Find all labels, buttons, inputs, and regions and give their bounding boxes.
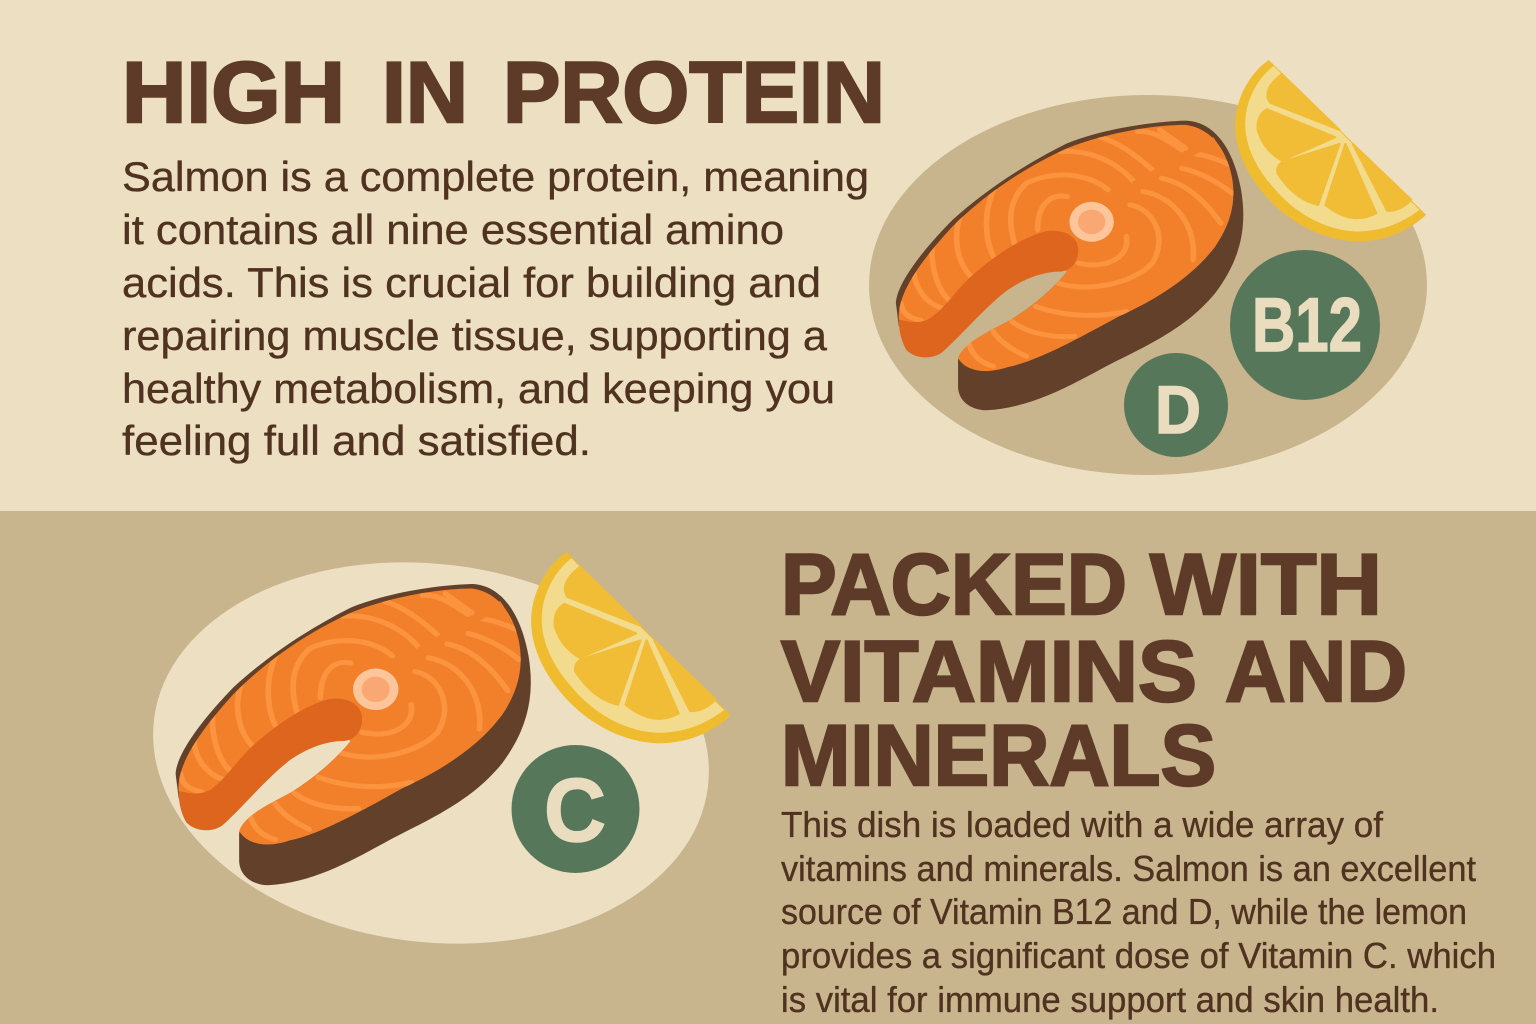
text block: protein description: Salmon is a complete protein, meaning (122, 153, 869, 200)
heading: packed with vitamins and minerals: MINERALS (781, 708, 1216, 804)
text block: protein description: repairing muscle tissue, supporting a (122, 312, 828, 359)
vitamin badge: B12: B12 (1252, 283, 1362, 368)
text block: protein description: acids. This is crucial for building and (122, 259, 821, 306)
heading: packed with vitamins and minerals: PACKED (781, 537, 1127, 633)
background: bottom tan band (0, 511, 1536, 1024)
heading: packed with vitamins and minerals: WITH (1150, 537, 1382, 633)
vitamin badge: B12 (1230, 250, 1380, 400)
vitamin badge: C (512, 745, 640, 873)
text block: vitamins description: is vital for immune support and skin health. (781, 979, 1439, 1020)
text block: vitamins description: This dish is loaded with a wide array of (781, 804, 1384, 845)
text block: vitamins description: provides a significant dose of Vitamin C. which (781, 935, 1496, 976)
plate (869, 95, 1427, 475)
text block: protein description: it contains all nine essential amino (122, 206, 784, 253)
heading: high in protein (122, 45, 885, 141)
panel: high in protein (122, 45, 885, 464)
lemon wedge (1235, 60, 1426, 241)
background: top cream band (0, 0, 1536, 511)
heading: packed with vitamins and minerals: VITAMINS (781, 624, 1197, 720)
heading: packed with vitamins and minerals: AND (1225, 624, 1407, 720)
heading: packed with vitamins and minerals (781, 537, 1407, 804)
vitamin badge: D (1124, 353, 1228, 457)
vitamin badge: D: D (1155, 372, 1201, 448)
heading: high in protein: IN (382, 45, 468, 141)
vitamin badge: C: C (544, 761, 606, 861)
salmon steak (896, 121, 1243, 410)
text block: vitamins description: vitamins and minerals. Salmon is an excellent (781, 848, 1476, 889)
text block: protein description: feeling full and satisfied. (122, 417, 591, 464)
salmon steak (176, 584, 531, 885)
illustration: salmon plate with vitamin C (131, 531, 731, 975)
text block: protein description (122, 153, 869, 464)
lemon wedge (531, 552, 731, 743)
text block: vitamins description: source of Vitamin B12 and D, while the lemon (781, 891, 1467, 932)
plate (131, 531, 731, 975)
heading: high in protein: HIGH (122, 45, 345, 141)
text block: vitamins description (781, 804, 1496, 1020)
text block: protein description: healthy metabolism, and keeping you (122, 365, 835, 412)
panel: packed with vitamins and minerals (781, 537, 1496, 1020)
heading: high in protein: PROTEIN (503, 45, 885, 141)
illustration: salmon plate with vitamins B12 and D (869, 60, 1427, 475)
